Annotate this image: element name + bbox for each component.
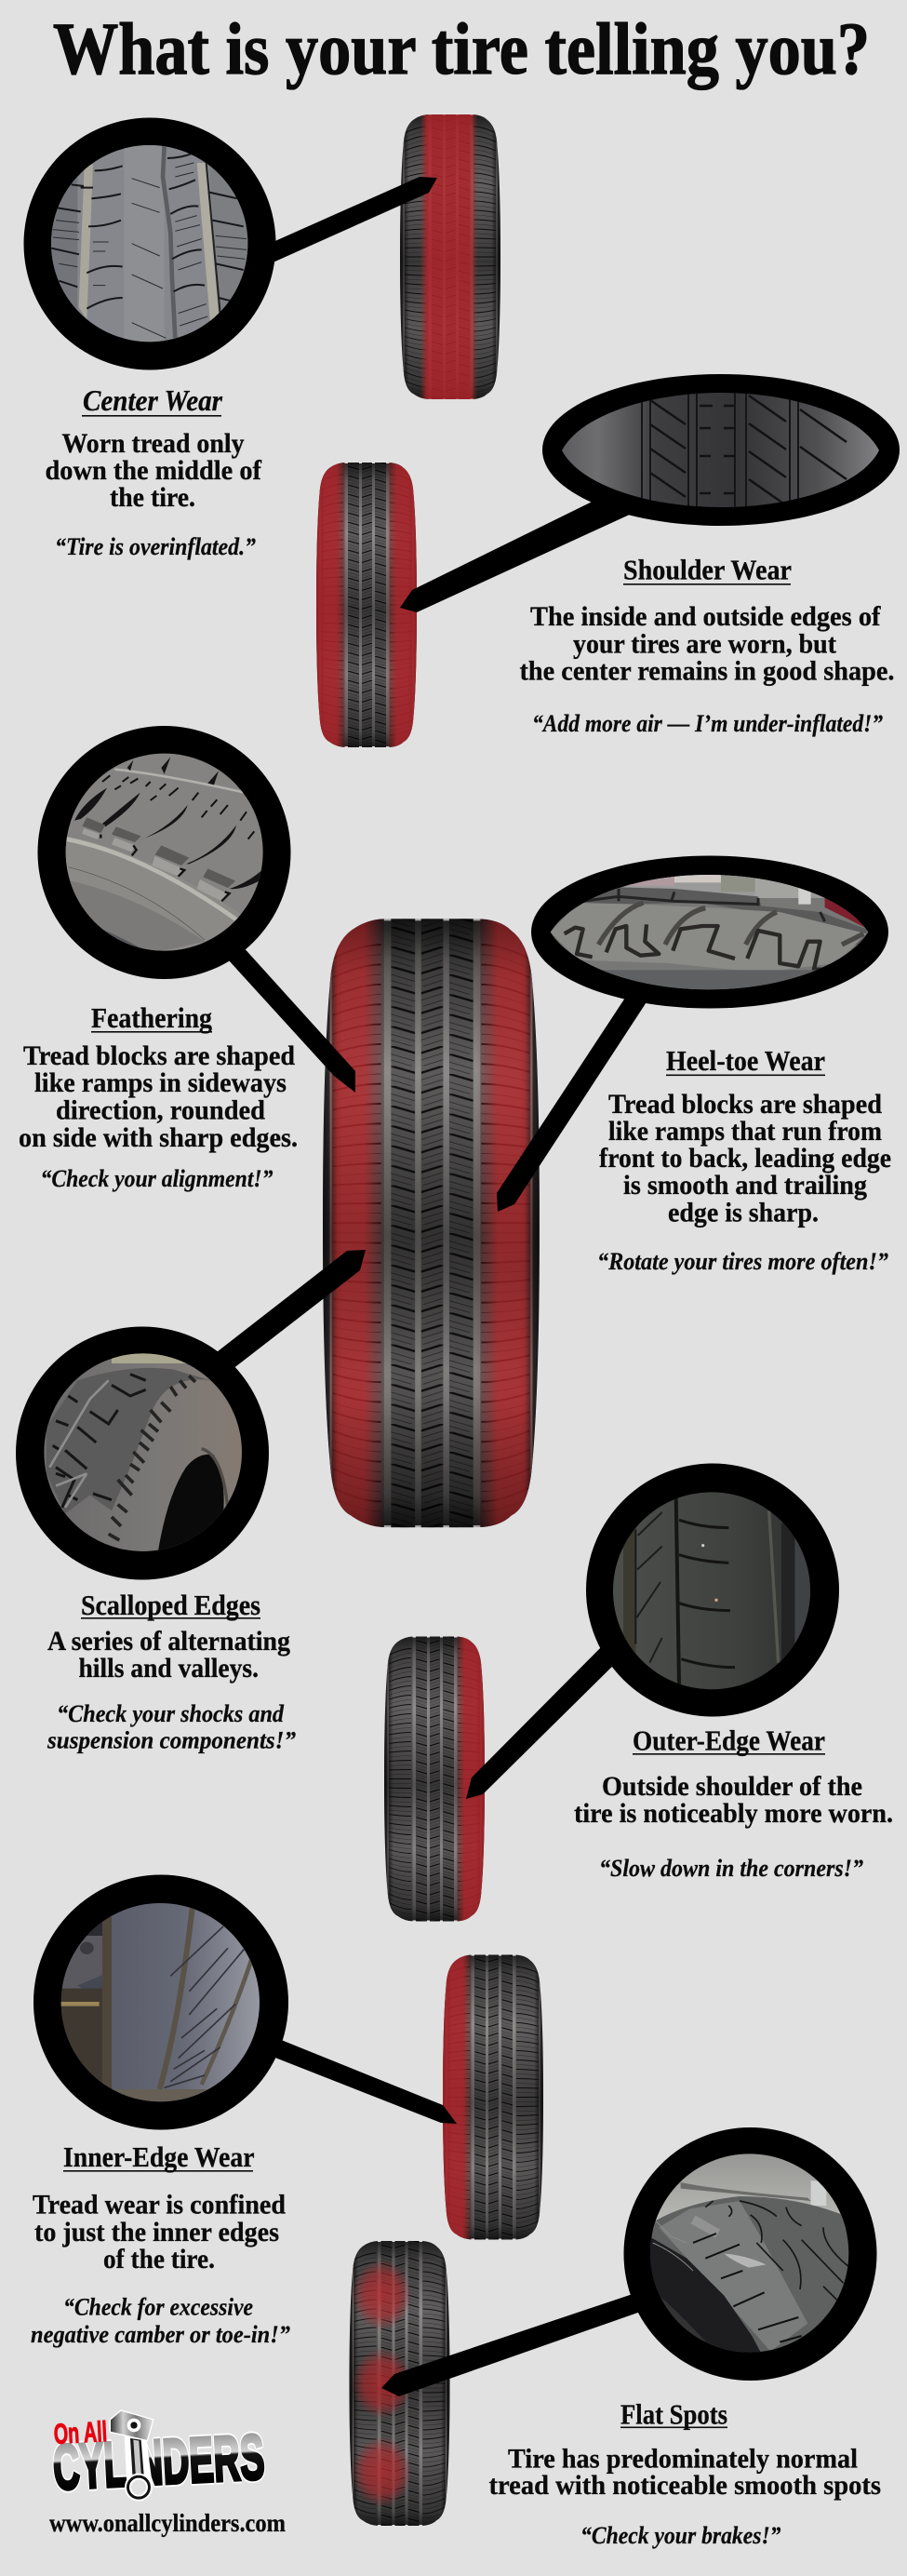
description: shoulder wear — [519, 601, 895, 687]
description: heel-toe wear: front to back, leading edge — [599, 1143, 891, 1174]
description: center wear: down the middle of — [45, 455, 262, 486]
description: heel-toe wear: Tread blocks are shaped — [608, 1089, 882, 1120]
tire: outer-edge wear — [384, 1634, 485, 1923]
quote: inner-edge wear — [31, 2293, 290, 2348]
heading: center wear: Center Wear — [83, 383, 222, 417]
tire: shoulder wear — [316, 461, 417, 749]
logo: On All Cylinders — [51, 2410, 266, 2503]
description: shoulder wear: The inside and outside edges of — [530, 601, 881, 632]
arrow: scalloped pointer — [205, 1250, 366, 1379]
description: flat spots: Tire has predominately normal — [508, 2444, 858, 2474]
arrow: center wear pointer — [260, 177, 437, 268]
description: outer-edge wear: tire is noticeably more worn. — [574, 1798, 893, 1829]
description: inner-edge wear: of the tire. — [103, 2244, 215, 2274]
description: outer-edge wear — [574, 1771, 893, 1829]
quote: inner-edge wear: “Check for excessive — [63, 2293, 253, 2321]
description: heel-toe wear: is smooth and trailing — [623, 1170, 867, 1201]
lens: flat spots photo — [623, 2127, 876, 2381]
website url: www.onallcylinders.com — [49, 2509, 286, 2537]
quote: center wear: “Tire is overinflated.” — [55, 533, 256, 560]
quote: outer-edge wear: “Slow down in the corners!” — [599, 1855, 863, 1882]
arrow: shoulder wear pointer — [400, 489, 656, 612]
tire: large tire for feathering, heel-toe and scalloped — [323, 915, 540, 1531]
panel: inner-edge wear — [31, 1874, 543, 2348]
lens: inner-edge photo — [33, 1874, 288, 2129]
panel: shoulder wear — [316, 374, 900, 749]
panel: outer-edge wear — [384, 1463, 893, 1923]
description: shoulder wear: the center remains in good shape. — [519, 655, 895, 687]
arrow: flat spots pointer — [381, 2290, 651, 2396]
heading: flat spots: Flat Spots — [620, 2397, 727, 2431]
quote: flat spots: “Check your brakes!” — [580, 2522, 781, 2549]
quote: heel-toe wear: “Rotate your tires more often!” — [597, 1248, 888, 1275]
description: flat spots: tread with noticeable smooth spots — [489, 2470, 881, 2501]
arrow: inner-edge pointer — [259, 2033, 457, 2124]
description: heel-toe wear: edge is sharp. — [668, 1197, 819, 1228]
description: feathering: like ramps in sideways — [34, 1067, 287, 1098]
lens: outer-edge photo — [586, 1463, 839, 1716]
description: center wear: the tire. — [110, 482, 195, 513]
description: inner-edge wear — [33, 2189, 286, 2274]
arrow: heel-toe pointer — [497, 986, 653, 1212]
description: feathering — [19, 1040, 298, 1153]
lens: shoulder wear photo — [542, 374, 900, 526]
quote: scalloped edges: suspension components!” — [47, 1727, 296, 1753]
description: scalloped edges: hills and valleys. — [78, 1653, 259, 1684]
tire: inner-edge wear — [443, 1952, 543, 2241]
tire: flat spots — [350, 2239, 450, 2528]
lens: feathering photo — [37, 726, 290, 979]
description: scalloped edges: A series of alternating — [47, 1626, 290, 1657]
quote: scalloped edges: “Check your shocks and — [57, 1700, 285, 1727]
description: outer-edge wear: Outside shoulder of the — [602, 1771, 862, 1802]
lens: center wear photo — [24, 117, 275, 370]
arrow: outer-edge pointer — [466, 1637, 625, 1799]
heading: feathering: Feathering — [91, 1001, 212, 1034]
description: shoulder wear: your tires are worn, but — [573, 629, 836, 659]
panel: feathering — [19, 726, 355, 1192]
description: center wear — [45, 428, 262, 513]
description: inner-edge wear: Tread wear is confined — [33, 2189, 286, 2220]
lens: scalloped photo — [16, 1327, 269, 1580]
heading: shoulder wear: Shoulder Wear — [623, 553, 792, 586]
quote: scalloped edges — [47, 1700, 296, 1753]
logo: On All Cylinders: On All — [53, 2416, 108, 2450]
panel: flat spots — [350, 2127, 881, 2549]
description: flat spots — [489, 2444, 881, 2501]
panel: heel-toe wear — [497, 856, 891, 1275]
icon: piston and connecting rod — [110, 2410, 153, 2501]
heading: inner-edge wear: Inner-Edge Wear — [63, 2140, 255, 2173]
tire: center wear — [400, 113, 500, 401]
logo: On All Cylinders: CYLINDERS — [51, 2422, 266, 2503]
panel: center wear — [24, 113, 500, 560]
description: feathering: Tread blocks are shaped — [23, 1040, 295, 1071]
panel: scalloped edges — [16, 1250, 366, 1753]
quote: inner-edge wear: negative camber or toe-in!” — [31, 2321, 290, 2348]
heading: outer-edge wear: Outer-Edge Wear — [633, 1724, 825, 1757]
description: inner-edge wear: to just the inner edges — [34, 2217, 279, 2247]
description: heel-toe wear — [599, 1089, 891, 1228]
heading: heel-toe wear: Heel-toe Wear — [666, 1044, 825, 1077]
arrow: feathering pointer — [219, 935, 355, 1093]
description: feathering: direction, rounded — [56, 1094, 265, 1126]
heading: scalloped edges: Scalloped Edges — [81, 1589, 260, 1621]
description: center wear: Worn tread only — [61, 428, 244, 459]
lens: heel-toe photo — [531, 856, 888, 1009]
description: feathering: on side with sharp edges. — [19, 1122, 298, 1153]
description: scalloped edges — [47, 1626, 290, 1684]
quote: feathering: “Check your alignment!” — [41, 1165, 273, 1192]
description: heel-toe wear: like ramps that run from — [608, 1116, 882, 1147]
